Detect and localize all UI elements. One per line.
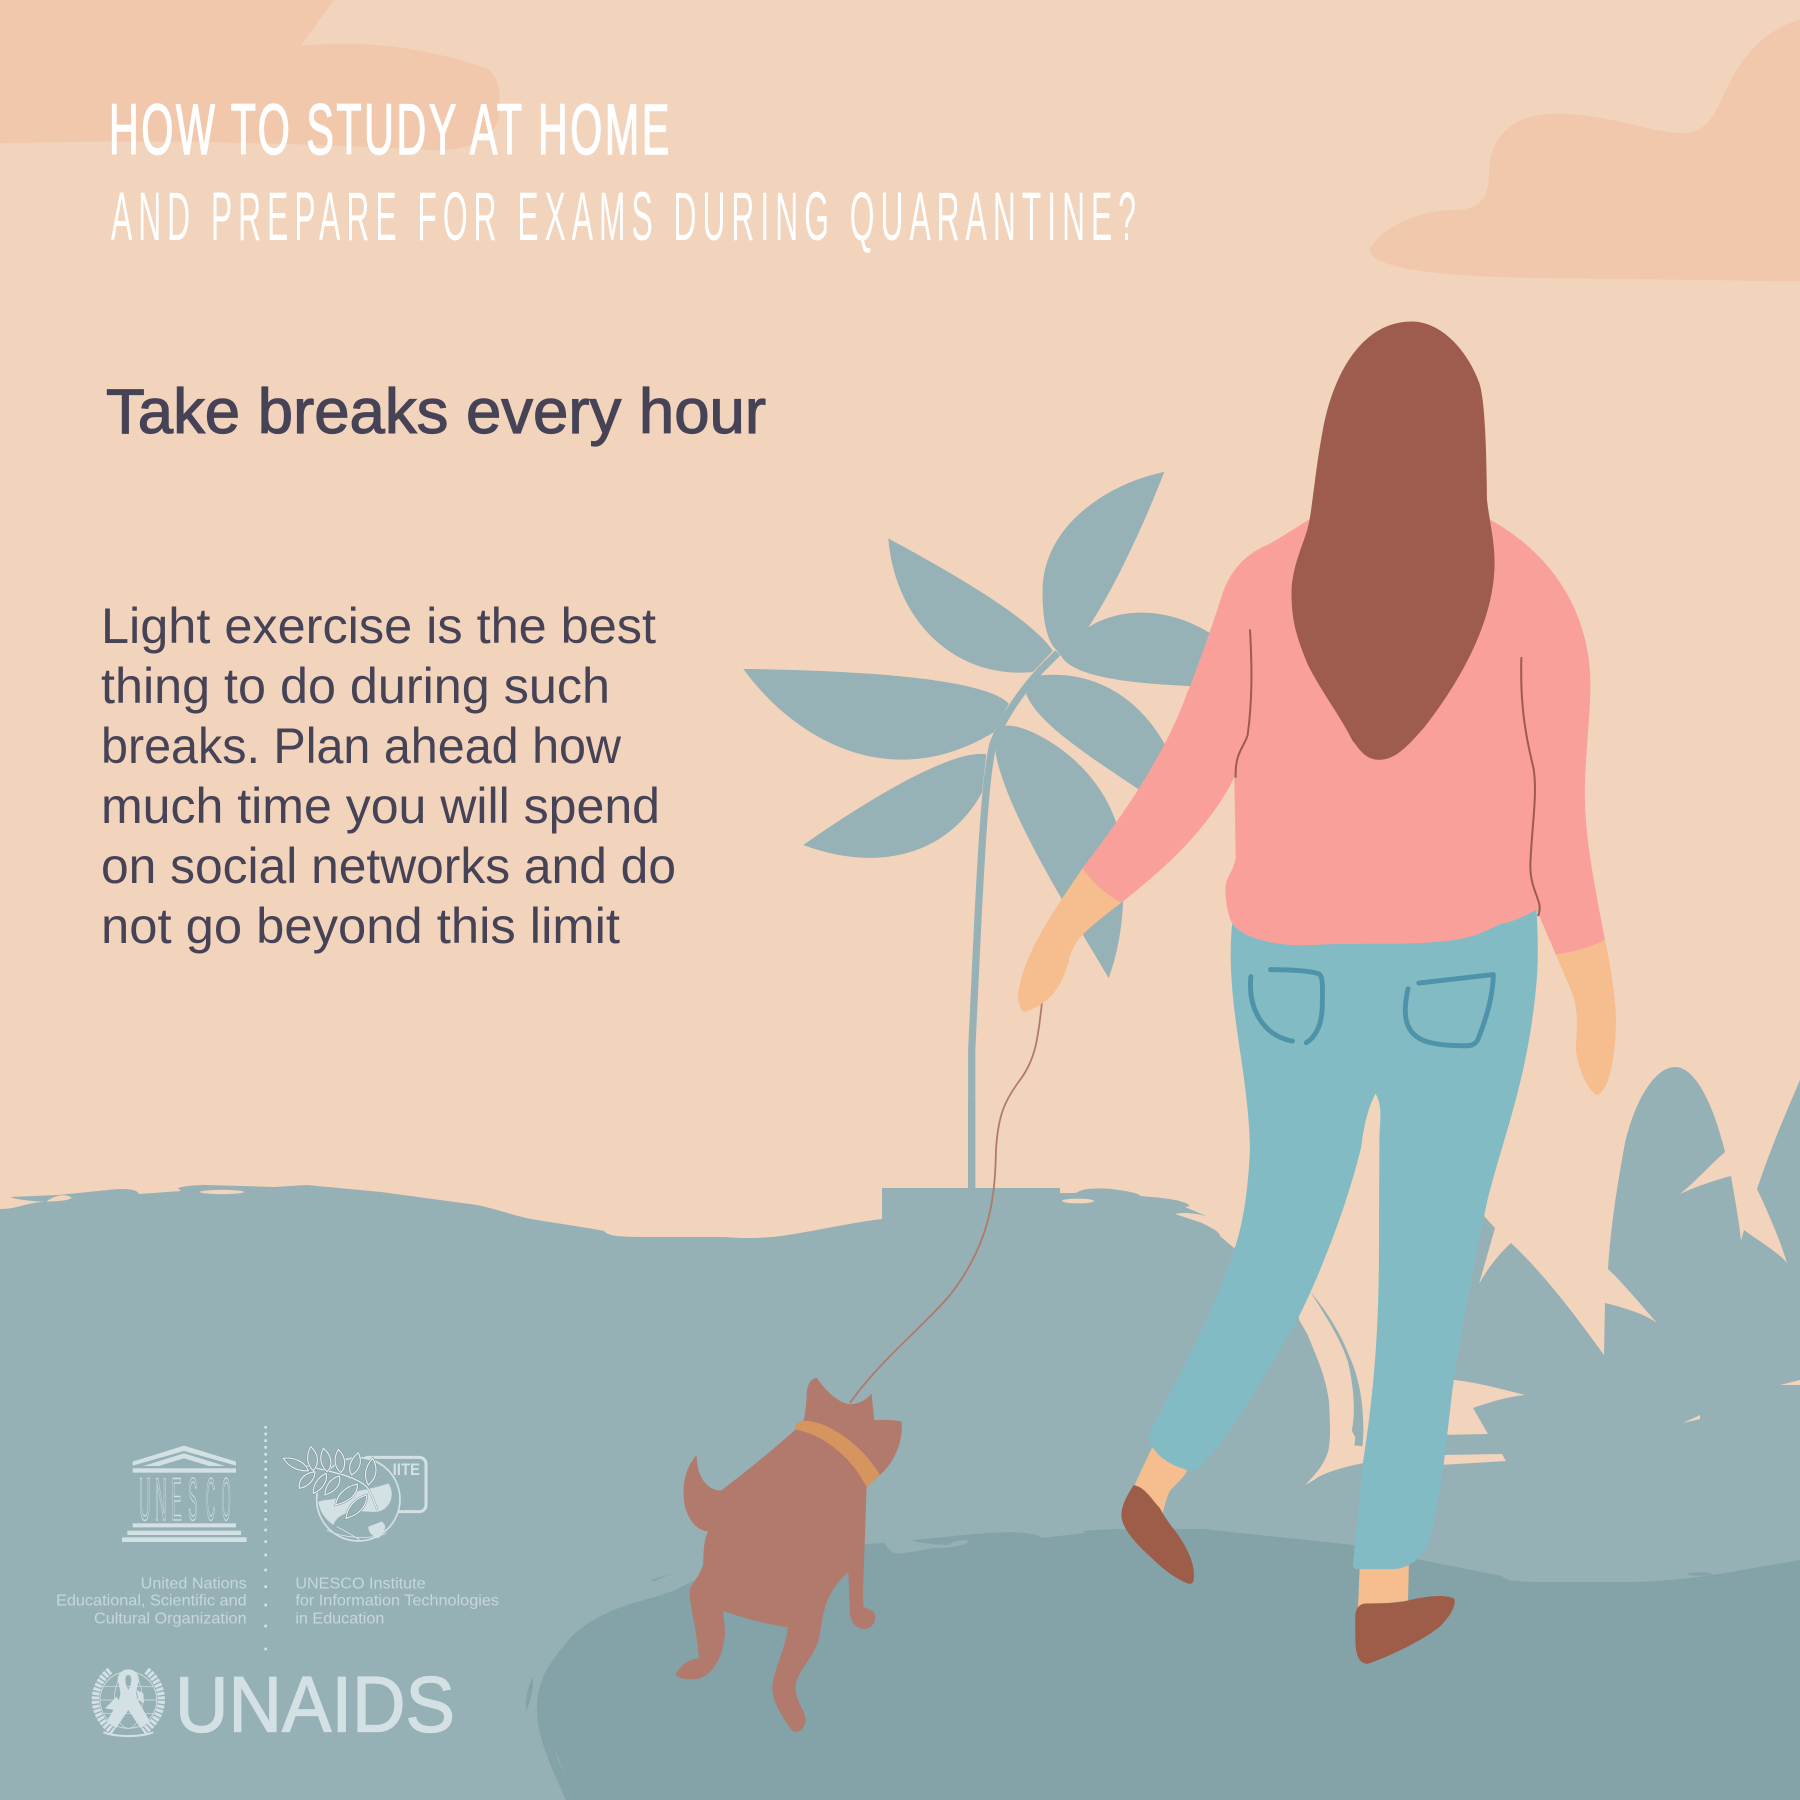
woman — [1018, 321, 1616, 1664]
logo: UNESCO temple: O — [222, 1465, 231, 1533]
heading: take breaks: Take breaks every hour — [106, 377, 766, 447]
woman: shoes — [1121, 1485, 1455, 1664]
body text: not go beyond this limit — [101, 898, 620, 954]
ground cutouts — [200, 1190, 1800, 1465]
dog — [676, 1378, 902, 1732]
woman: hands — [1018, 868, 1616, 1095]
logo: IITE — [283, 1447, 426, 1541]
ground: front hill — [537, 1529, 1800, 1800]
woman: sweater — [1083, 520, 1605, 954]
logo: UNAIDS wordmark: UNAIDS — [175, 1660, 455, 1749]
caption: IITE: for Information Technologies — [295, 1593, 499, 1610]
logo: UNESCO temple: U — [139, 1465, 151, 1533]
logo: UNAIDS emblem — [95, 1669, 161, 1736]
body text — [101, 598, 676, 954]
dotted divider — [264, 1426, 267, 1650]
caption: UNESCO: United Nations — [141, 1576, 247, 1593]
logo: UNESCO temple: S — [188, 1465, 197, 1533]
caption: UNESCO: Educational, Scientific and — [56, 1593, 247, 1610]
caption: UNESCO — [56, 1576, 247, 1628]
dog: collar — [795, 1421, 880, 1487]
leash — [850, 1002, 1042, 1403]
woman: ankles — [1135, 1446, 1409, 1607]
caption: UNESCO: Cultural Organization — [94, 1611, 247, 1628]
logo: UNESCO temple: C — [206, 1465, 215, 1533]
cloud: top right — [1370, 20, 1800, 281]
logo: UNESCO temple — [122, 1446, 247, 1542]
ground wisps — [526, 1572, 1712, 1776]
body text: Light exercise is the best — [101, 598, 656, 654]
woman: jeans — [1149, 910, 1538, 1569]
title: HOW TO STUDY AT HOME — [109, 90, 669, 170]
cloud: top left — [0, 0, 500, 150]
woman: pockets — [1250, 970, 1493, 1046]
title: AND PREPARE FOR EXAMS DURING QUARANTINE? — [111, 178, 1136, 255]
caption: IITE: in Education — [295, 1611, 384, 1628]
ground: back hill and foliage — [0, 1067, 1800, 1800]
logo: UNESCO temple: N — [155, 1465, 167, 1533]
caption: IITE: UNESCO Institute — [295, 1576, 426, 1593]
title — [109, 90, 1136, 255]
logos block — [56, 1426, 499, 1749]
caption: IITE — [295, 1576, 499, 1628]
woman: sweater seams — [1236, 629, 1540, 916]
body text: thing to do during such — [101, 658, 610, 714]
woman: hair — [1291, 321, 1495, 760]
logo: IITE: IITE — [393, 1460, 420, 1479]
gap between legs — [1299, 1174, 1412, 1485]
body text: on social networks and do — [101, 838, 676, 894]
logo: UNESCO temple: E — [172, 1465, 182, 1533]
body text: much time you will spend — [101, 778, 660, 834]
body text: breaks. Plan ahead how — [101, 718, 622, 774]
plant — [743, 472, 1210, 1190]
